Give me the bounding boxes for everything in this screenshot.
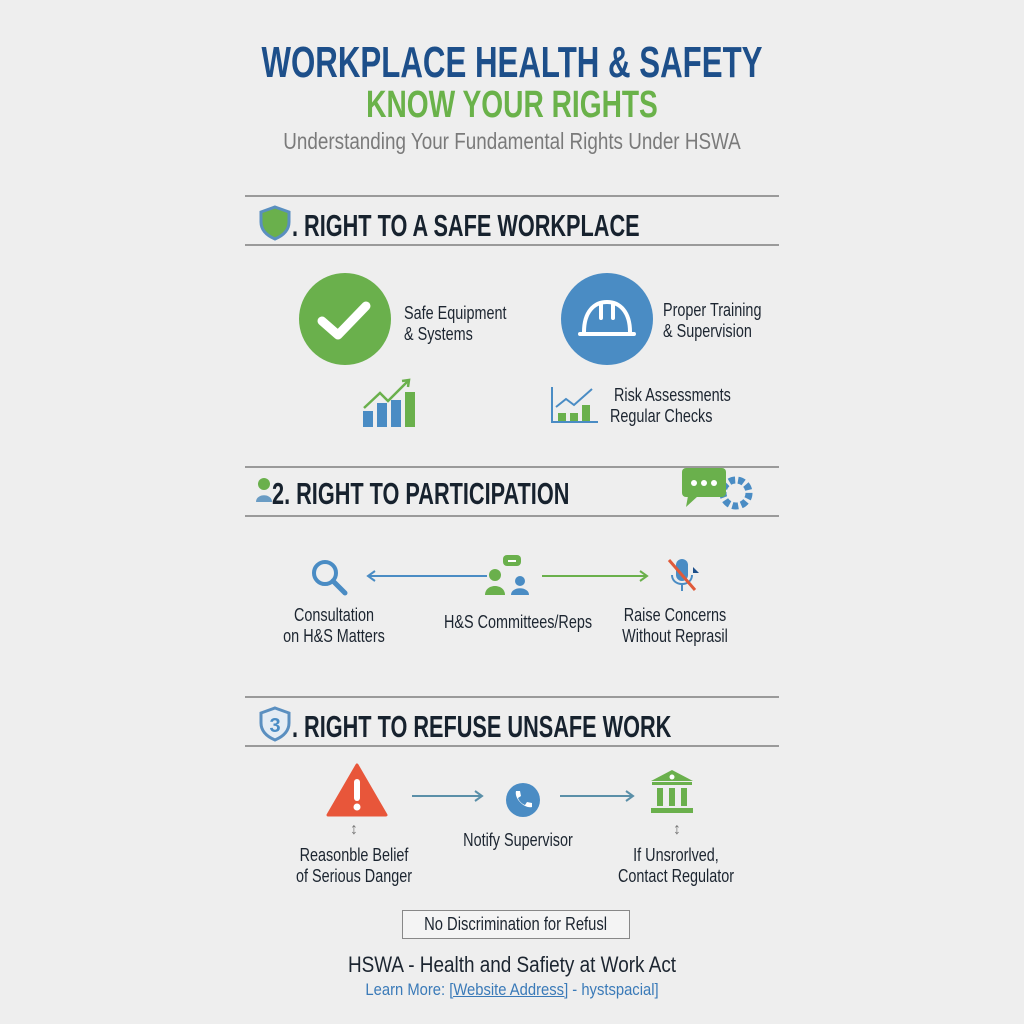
footer act name: HSWA - Health and Safiety at Work Act [348, 952, 676, 977]
text: raise concerns [622, 605, 728, 646]
arrow [560, 790, 635, 802]
footer link: Learn More: [Website Address] - hystspacial] [365, 980, 659, 999]
text: safe equipment: & Systems [404, 324, 473, 344]
text: training [663, 300, 761, 341]
text: reasonable belief: Reasonble Belief [300, 845, 408, 865]
panel: refusal flow [326, 763, 693, 817]
icon: phone [506, 783, 540, 817]
subtitle: know your rights: KNOW YOUR RIGHTS [366, 84, 658, 126]
icon: muted mic [668, 559, 699, 591]
icon: magnifier [312, 560, 348, 596]
title: WORKPLACE HEALTH & SAFETY [262, 38, 762, 87]
text: reasonable belief [296, 845, 412, 886]
icon: blue hard hat [561, 273, 653, 365]
arrow right [542, 570, 649, 582]
text: raise concerns: Raise Concerns [624, 605, 726, 625]
section 2 heading: 2. RIGHT TO PARTICIPATION [272, 476, 569, 511]
text: regulator: If Unsrorlved, [633, 845, 719, 865]
icon: chat and gear [682, 468, 752, 510]
text: consultation: Consultation [294, 605, 374, 625]
text: safe equipment [404, 303, 506, 344]
panel: safe workplace items [299, 273, 761, 427]
arrow left [366, 570, 487, 582]
text: raise concerns: Without Reprasil [622, 626, 728, 646]
icon: warning [326, 763, 388, 816]
text: training: & Supervision [663, 321, 752, 341]
text: risk assessments: Risk Assessments [614, 385, 731, 405]
icon: regulator building [651, 770, 693, 813]
callout: no discrimination: No Discrimination for Refusl [425, 914, 607, 934]
text: committees: H&S Committees/Reps [444, 612, 592, 632]
arrow [412, 790, 484, 802]
section 1 heading: . RIGHT TO A SAFE WORKPLACE [292, 208, 640, 243]
text: regulator [618, 845, 734, 886]
icon: chart [363, 378, 415, 427]
text: consultation: on H&S Matters [283, 626, 385, 646]
arrow vertical: ↕ [350, 821, 358, 838]
text: consultation [283, 605, 385, 646]
text: risk assessments: Regular Checks [610, 406, 712, 426]
arrow vertical: ↕ [673, 821, 681, 838]
icon: green check [299, 273, 391, 365]
text: reasonable belief: of Serious Danger [296, 866, 412, 886]
text: risk assessments [610, 385, 731, 426]
icon: risk chart [551, 387, 598, 423]
text: safe equipment: Safe Equipment [404, 303, 506, 323]
section 3 heading: . RIGHT TO REFUSE UNSAFE WORK [292, 709, 671, 744]
callout: no discrimination [402, 910, 630, 939]
text: regulator: Contact Regulator [618, 866, 734, 886]
tagline: Understanding Your Fundamental Rights Under HSWA [283, 128, 741, 154]
text: notify: Notify Supervisor [463, 830, 573, 850]
section 3 heading: 3 [269, 715, 281, 737]
text: training: Proper Training [663, 300, 761, 320]
panel: participation flow [312, 555, 699, 596]
icon: committee people [485, 555, 529, 595]
